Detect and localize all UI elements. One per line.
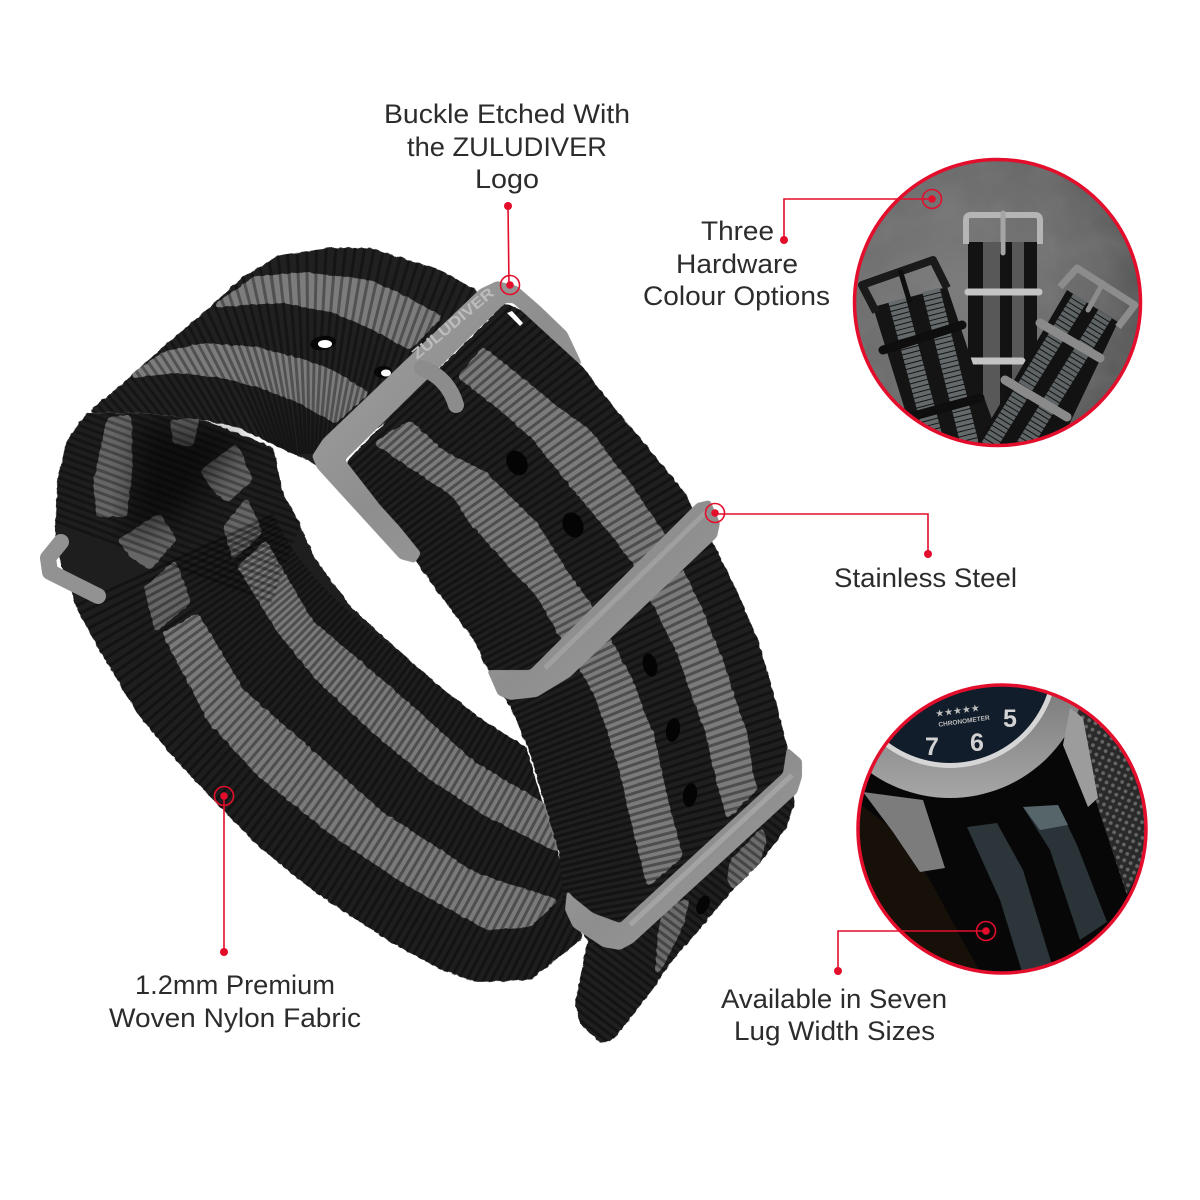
callout: stainless steel: Stainless Steel bbox=[834, 563, 1017, 593]
inset photo: watch with strap bbox=[856, 683, 1148, 975]
callout: nylon fabric bbox=[109, 786, 361, 1033]
dotted leather background bbox=[1077, 709, 1144, 895]
inset red border bbox=[858, 685, 1146, 973]
watch case bbox=[871, 696, 1079, 798]
dial numerals: 6 bbox=[970, 729, 984, 757]
lower band grey stripes bbox=[162, 540, 559, 930]
callout: hardware colour options bbox=[643, 190, 942, 311]
inset photo: three hardware colour options bbox=[850, 155, 1145, 460]
upper steel keeper bbox=[487, 500, 720, 700]
main strap section bbox=[345, 303, 795, 960]
upper strap band bbox=[87, 246, 478, 466]
inset red border bbox=[854, 160, 1140, 446]
callout: hardware colour options: Colour Options bbox=[643, 281, 830, 311]
buckle etched ZULUDIVER bbox=[312, 281, 584, 563]
callout: nylon fabric: Woven Nylon Fabric bbox=[109, 1003, 361, 1033]
callout: buckle logo: Logo bbox=[475, 164, 539, 194]
callout: buckle logo: Buckle Etched With bbox=[384, 99, 630, 129]
callout: lug width sizes bbox=[721, 922, 996, 1046]
nylon strap with steel hardware bbox=[48, 248, 802, 1050]
black PVD strap (left) bbox=[858, 256, 992, 442]
chronometer mark: ★★★★★ bbox=[935, 703, 981, 720]
fold shadow bbox=[125, 425, 250, 540]
buckle pin bbox=[422, 368, 456, 405]
callout: hardware colour options: Hardware bbox=[676, 249, 798, 279]
callout: nylon fabric: 1.2mm Premium bbox=[135, 970, 335, 1000]
buckle logo text: ZULUDIVER bbox=[409, 284, 498, 363]
silver strap (centre) bbox=[966, 213, 1040, 452]
lower strap band bbox=[55, 413, 610, 982]
brown leather area bbox=[860, 806, 978, 969]
dial numerals: 5 bbox=[1003, 705, 1017, 733]
nylon strap stripes bbox=[967, 805, 1107, 975]
strap holes bbox=[502, 447, 699, 808]
dial bbox=[888, 686, 1048, 763]
fold stripes bbox=[93, 415, 263, 633]
callout: lug width sizes: Available in Seven bbox=[721, 984, 947, 1014]
callout: lug width sizes: Lug Width Sizes bbox=[734, 1016, 935, 1046]
callout: hardware colour options: Three bbox=[701, 216, 774, 246]
lower steel keeper bbox=[565, 747, 802, 950]
dial numerals bbox=[926, 710, 1016, 755]
brushed steel strap (right) bbox=[973, 268, 1135, 452]
lugs bbox=[863, 792, 945, 872]
chronometer mark: CHRONOMETER bbox=[938, 715, 990, 729]
callout: stainless steel bbox=[706, 504, 1017, 593]
chronometer mark bbox=[936, 704, 990, 726]
callout: buckle logo bbox=[384, 99, 630, 294]
strap tail below lower keeper bbox=[575, 785, 795, 1050]
callout: buckle logo: the ZULUDIVER bbox=[407, 132, 607, 162]
dial numerals: 7 bbox=[925, 733, 939, 761]
left keeper ring bbox=[48, 542, 98, 596]
